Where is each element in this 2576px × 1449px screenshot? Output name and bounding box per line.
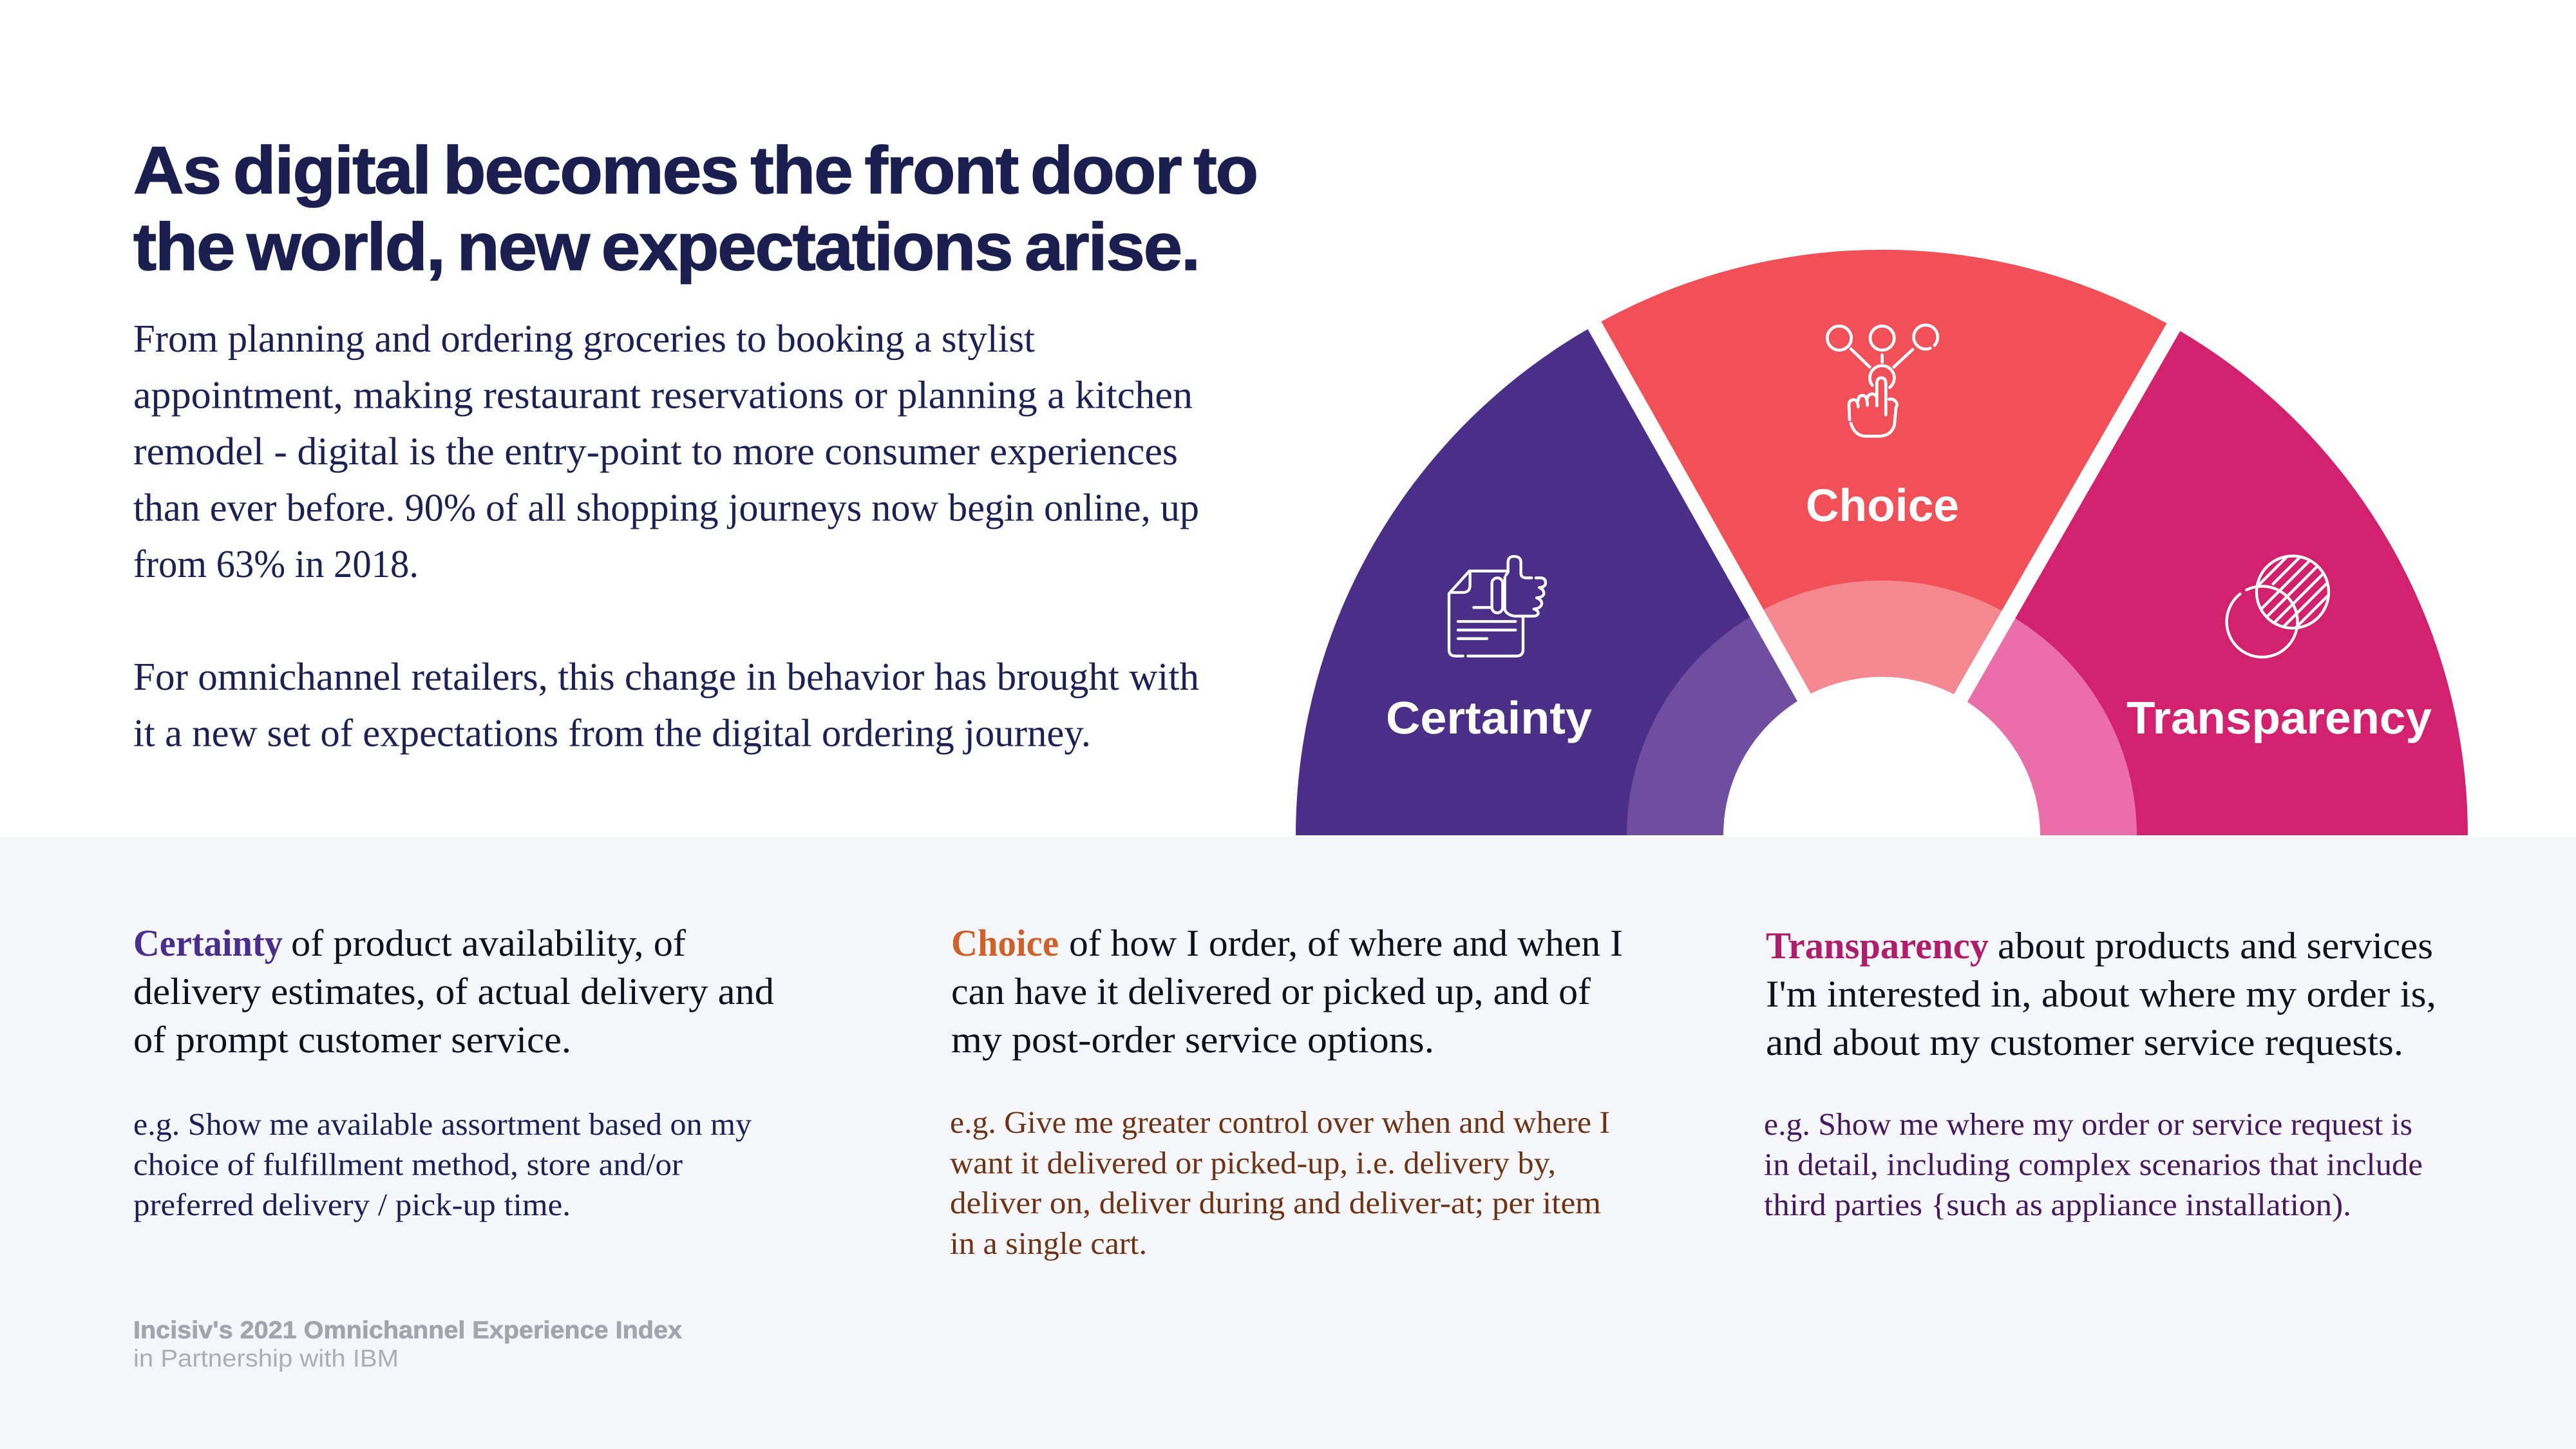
second intro paragraph	[133, 656, 1199, 755]
wedge: transparency	[1882, 327, 2468, 835]
title: As digital becomes the front door to	[133, 133, 1257, 208]
example: certainty: preferred delivery / pick-up time.	[133, 1187, 571, 1222]
panel: lower background	[0, 837, 2576, 1449]
statement: transparency: I'm interested in, about where my order is,	[1766, 972, 2436, 1015]
example: certainty: choice of fulfillment method, store and/or	[133, 1146, 683, 1182]
footer credit: Incisiv's 2021 Omnichannel Experience Index	[133, 1317, 682, 1344]
statement: transparency: about products and services	[1998, 924, 2433, 967]
footer credit: in Partnership with IBM	[133, 1345, 399, 1372]
intro paragraph: from 63% in 2018.	[133, 543, 419, 586]
semicircle chart	[1296, 250, 2468, 835]
example: certainty	[133, 1106, 752, 1222]
column: choice	[950, 922, 1623, 1261]
column: certainty	[133, 922, 774, 1222]
label: certainty: Certainty	[1386, 693, 1593, 744]
statement: choice: Choice	[951, 922, 1059, 964]
title: the world, new expectations arise.	[133, 210, 1199, 285]
wedge: choice	[1595, 250, 2174, 835]
wedge: certainty	[1296, 325, 1882, 835]
label: choice: Choice	[1806, 480, 1959, 531]
intro paragraph: than ever before. 90% of all shopping journeys now begin online, up	[133, 487, 1199, 529]
statement: transparency: Transparency	[1766, 924, 1989, 967]
icon: overlapping circles	[2225, 554, 2330, 658]
statement: transparency	[1766, 924, 2436, 1063]
statement: certainty: of product availability, of	[291, 922, 686, 964]
example: transparency: third parties {such as appliance installation).	[1764, 1187, 2351, 1222]
icon: hand choosing between options	[1827, 325, 1938, 436]
column: transparency	[1764, 924, 2436, 1222]
example: choice	[950, 1104, 1610, 1261]
example: transparency: in detail, including complex scenarios that include	[1764, 1146, 2423, 1182]
example: choice: e.g. Give me greater control over when and where I	[950, 1104, 1610, 1140]
footer credit	[133, 1317, 682, 1372]
intro paragraph: From planning and ordering groceries to booking a stylist	[133, 317, 1035, 361]
intro paragraph	[133, 317, 1199, 586]
statement: certainty: Certainty	[133, 922, 283, 964]
statement: choice: of how I order, of where and when I	[1069, 922, 1623, 964]
example: choice: deliver on, deliver during and deliver-at; per item	[950, 1185, 1601, 1220]
intro paragraph: remodel - digital is the entry-point to more consumer experiences	[133, 430, 1178, 473]
example: certainty: e.g. Show me available assortment based on my	[133, 1106, 752, 1142]
intro paragraph: appointment, making restaurant reservations or planning a kitchen	[133, 374, 1193, 417]
second intro paragraph: it a new set of expectations from the digital ordering journey.	[133, 712, 1091, 755]
example: transparency: e.g. Show me where my order or service request is	[1764, 1106, 2412, 1142]
statement: choice: can have it delivered or picked up, and of	[951, 970, 1591, 1012]
statement: certainty: of prompt customer service.	[133, 1018, 571, 1061]
statement: transparency: and about my customer service requests.	[1766, 1021, 2403, 1063]
icon: document with thumbs up	[1449, 556, 1546, 656]
title	[133, 133, 1257, 285]
example: choice: in a single cart.	[950, 1226, 1147, 1261]
statement: choice: my post-order service options.	[951, 1018, 1434, 1061]
statement: choice	[951, 922, 1623, 1061]
statement: certainty: delivery estimates, of actual delivery and	[133, 970, 774, 1012]
second intro paragraph: For omnichannel retailers, this change in behavior has brought with	[133, 656, 1199, 699]
label: transparency: Transparency	[2126, 693, 2432, 744]
example: transparency	[1764, 1106, 2423, 1222]
statement: certainty	[133, 922, 774, 1061]
example: choice: want it delivered or picked-up, i.e. delivery by,	[950, 1145, 1556, 1180]
